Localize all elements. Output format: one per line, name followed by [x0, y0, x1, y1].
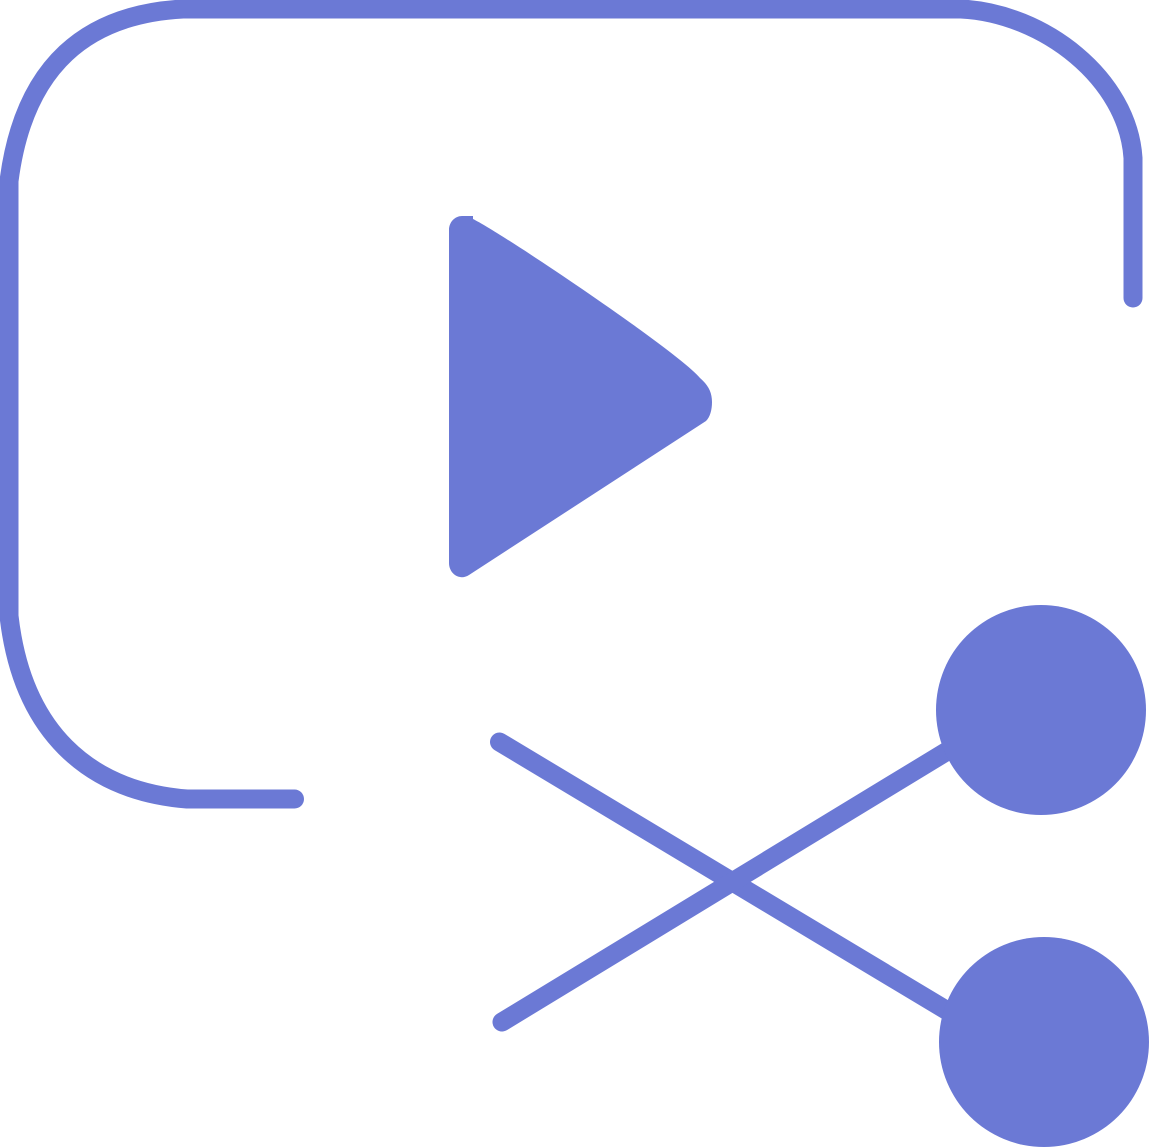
share icon	[500, 605, 1149, 1147]
share line to upper node	[502, 719, 1000, 1022]
share line to lower node	[500, 742, 1000, 1042]
screen frame outline	[9, 9, 1133, 799]
play triangle	[449, 216, 712, 577]
upper node	[936, 605, 1146, 815]
lower node	[939, 937, 1149, 1147]
